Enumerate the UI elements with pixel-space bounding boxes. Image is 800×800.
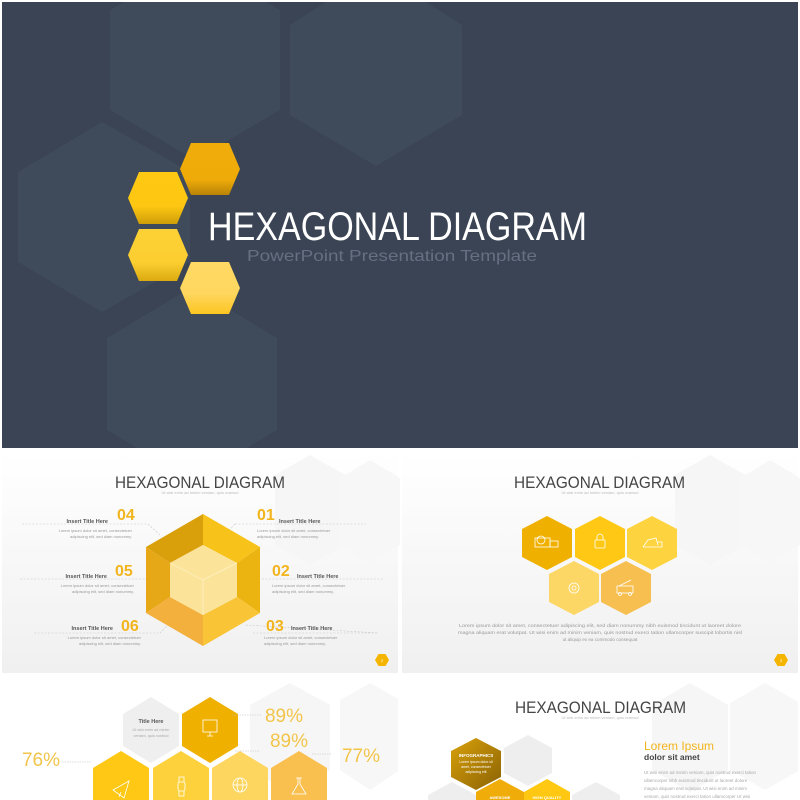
panel: icon honeycomb slide: Ut wisi enim ad minim veniam, quis nostrud <box>562 490 638 495</box>
text block: ut aliquip ex ea commodo consequat <box>563 637 638 642</box>
callouts: 05 <box>115 563 133 580</box>
panel: infographics slide: magna aliquam erat volutpat. Ut wisi enim ad minim <box>644 786 747 791</box>
hexagons: INFOGRAPHICS <box>459 753 493 758</box>
panel: six-part hexagon slide: Insert Title Here <box>66 574 107 580</box>
panel: percentage honeycomb slide: Ut wisi enim ad minim <box>133 728 169 732</box>
hexagons: adipiscing elit <box>465 770 487 774</box>
heading: HEXAGONAL DIAGRAM <box>515 698 686 717</box>
panel: six-part hexagon slide <box>2 452 400 673</box>
heading: HEXAGONAL DIAGRAM <box>514 473 685 492</box>
panel: infographics slide: dolor sit amet <box>644 752 700 762</box>
callouts: 04 <box>117 507 135 524</box>
callouts: 03 <box>266 618 284 635</box>
panel: six-part hexagon slide: Ut wisi enim ad minim veniam, quis nostrud <box>162 490 238 495</box>
callouts <box>115 507 290 635</box>
percentages: 89% <box>265 706 303 727</box>
panel: six-part hexagon slide: adipiscing elit, sed diam nonummy. <box>272 589 334 594</box>
panel: six-part hexagon slide: adipiscing elit, sed diam nonummy. <box>79 641 141 646</box>
percentages: 76% <box>22 750 60 771</box>
callouts: 01 <box>257 507 275 524</box>
page number <box>774 654 788 666</box>
panel: percentage honeycomb slide <box>22 684 380 800</box>
panel: infographics slide: veniam, quis nostrud exerci tation ullamcorper Ut wisi <box>644 794 750 799</box>
percentages <box>22 708 380 766</box>
panel: six-part hexagon slide: Lorem ipsum dolor sit amet, consectetuer <box>272 583 346 588</box>
panel: cover slide <box>2 0 798 480</box>
hexagons: AWESOME <box>490 795 511 800</box>
panel: infographics slide: Ut wisi enim ad minim veniam, quis nostrud exerci tation <box>644 770 757 775</box>
page number <box>375 654 389 666</box>
subtitle: PowerPoint Presentation Template <box>247 248 537 265</box>
page number: 3 <box>780 658 783 663</box>
panel: six-part hexagon slide: Insert Title Here <box>297 574 338 580</box>
hexagons <box>428 735 620 800</box>
panel: infographics slide <box>428 684 756 800</box>
panel: six-part hexagon slide: Insert Title Here <box>67 519 108 525</box>
page number: 2 <box>381 658 384 663</box>
hexagons: HIGH QUALITY <box>533 795 562 800</box>
panel: six-part hexagon slide: adipiscing elit, sed diam nonummy. <box>72 589 134 594</box>
panel: six-part hexagon slide: adipiscing elit, sed diam nonummy. <box>257 534 319 539</box>
panel: six-part hexagon slide: Insert Title Here <box>279 519 320 525</box>
icon hexagons <box>522 516 677 615</box>
text block: magna aliquam erat volutpat. Ut wisi enim ad minim veniam, quis nostrud exerci tation ullamcorper suscipit lobortis nisl <box>458 630 742 635</box>
panel: six-part hexagon slide: Lorem ipsum dolor sit amet, consectetuer <box>59 528 133 533</box>
text block: Lorem Ipsum <box>644 739 714 753</box>
chart: 3D hexagon <box>146 514 260 646</box>
panel: six-part hexagon slide: Lorem ipsum dolor sit amet, consectetuer <box>68 635 142 640</box>
icon: yellow hexagon cluster <box>128 143 240 314</box>
hexagons: Lorem ipsum dolor sit <box>459 760 493 764</box>
panel: six-part hexagon slide: Lorem ipsum dolor sit amet, consectetuer <box>264 635 338 640</box>
hexagons <box>93 697 327 800</box>
panel: infographics slide: Ut wisi enim ad minim veniam, quis nostrud <box>562 715 638 720</box>
panel: six-part hexagon slide: Insert Title Here <box>72 626 113 632</box>
panel: infographics slide: ullamcorper nibh euismod tincidunt ut laoreet dolore <box>644 778 748 783</box>
dashed leader lines <box>20 524 383 633</box>
text: title here: Title Here <box>139 719 163 725</box>
callouts: 02 <box>272 563 290 580</box>
panel: six-part hexagon slide: adipiscing elit, sed diam nonummy. <box>264 641 326 646</box>
callouts: 06 <box>121 618 139 635</box>
panel: percentage honeycomb slide: veniam, quis nostrud <box>133 734 169 738</box>
panel: icon honeycomb slide <box>402 452 800 673</box>
panel: six-part hexagon slide: Lorem ipsum dolor sit amet, consectetuer <box>61 583 135 588</box>
text block <box>458 623 742 642</box>
panel: six-part hexagon slide: Lorem ipsum dolor sit amet, consectetuer <box>257 528 331 533</box>
percentages: 77% <box>342 746 380 767</box>
panel: six-part hexagon slide: Insert Title Here <box>291 626 332 632</box>
percentages: 89% <box>270 731 308 752</box>
title: HEXAGONAL DIAGRAM <box>208 205 587 249</box>
panel: six-part hexagon slide: adipiscing elit, sed diam nonummy. <box>70 534 132 539</box>
hexagons: amet, consectetuer <box>461 765 492 769</box>
text block: Lorem ipsum dolor sit amet, consectetuer adipiscing elit, sed diam nonummy nibh euismod tincidunt ut laoreet dolore <box>459 623 742 628</box>
heading: HEXAGONAL DIAGRAM <box>115 473 285 492</box>
